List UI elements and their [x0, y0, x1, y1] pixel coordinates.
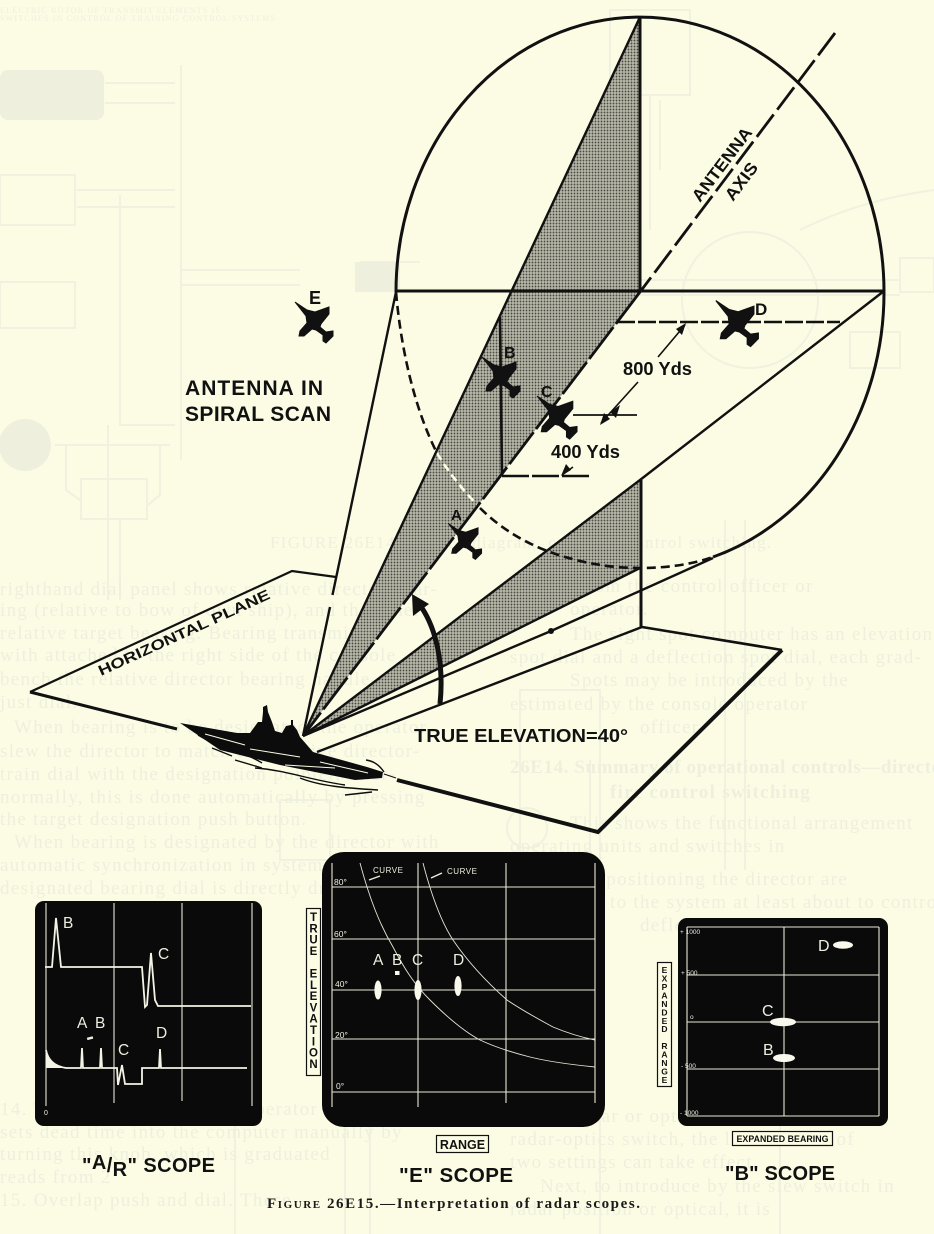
bleed-through ghost print from reverse page: two settings can take effect.: [510, 1152, 759, 1173]
B range scale: [680, 929, 700, 1117]
bleed-through ghost print from reverse page: radar-optics switch, the latter which of: [510, 1129, 855, 1150]
bleed-through ghost print from reverse page: righthand dial panel shows relative director bear-: [0, 579, 438, 600]
ship illustration: [180, 705, 396, 795]
bleed-through ghost print from reverse page: 15. Overlap push and dial. These: [0, 1190, 292, 1211]
bleed-through ghost print from reverse page: SWITCHES IN CONTROL OF TRAINING CONTROL SYSTEMS: [0, 14, 275, 23]
bleed-through ghost print from reverse page: normally, this is done automatically by pressing: [0, 787, 426, 808]
label: antenna axis: AXIS: [721, 159, 762, 204]
range marks at targets: [502, 322, 840, 476]
expanded range axis label: R: [661, 1041, 668, 1051]
E target labels: [373, 952, 464, 969]
B range scale: + 500: [681, 970, 698, 977]
bleed-through ghost print from reverse page: just dial.: [0, 692, 78, 713]
bleed-through ghost print from reverse page: radar position or optical, it is: [510, 1199, 771, 1220]
A/R labels: 0: [44, 1110, 48, 1117]
E curve callouts: CURVE: [373, 866, 403, 875]
B target labels: [762, 938, 830, 1059]
A/R scope title: A: [92, 1152, 106, 1174]
expanded range axis label: D: [661, 1024, 668, 1034]
target E aircraft: E: [309, 288, 321, 308]
bleed-through ghost print from reverse page: train dial with the designation pointer, inter-: [0, 764, 396, 785]
bleed-through ghost print from reverse page: relative target bearing. Bearing transmitter: [0, 623, 380, 644]
true elevation axis label: V: [310, 1002, 318, 1014]
bleed-through ghost print from reverse page: turning this knob, which is graduated: [0, 1144, 331, 1165]
B scope: [678, 918, 888, 1126]
A/R labels: B: [95, 1015, 105, 1032]
A/R labels: C: [158, 946, 169, 963]
expanded range axis label: X: [662, 974, 668, 984]
bleed-through ghost print from reverse page: switch radar or optical or: [510, 1106, 735, 1127]
expanded range axis label: D: [661, 1007, 668, 1017]
bleed-through ghost print from reverse page: the target designation push button.: [0, 809, 307, 830]
E degree scale: 80°: [334, 877, 347, 887]
A/R lower trace: [46, 1048, 247, 1085]
bleed-through ghost print from reverse page: This shows the functional arrangement: [570, 813, 914, 834]
expanded range axis label: A: [661, 990, 668, 1000]
bleed-through ghost print from reverse page: operator.: [570, 599, 649, 620]
bleed-through ghost print from reverse page: Next, to introduce by the slew switch in: [540, 1176, 895, 1197]
true elevation axis label: E: [310, 946, 318, 958]
target C aircraft: C: [541, 384, 553, 401]
vertical line through target B: [500, 317, 502, 476]
bleed-through ghost print from reverse page: spot dial and a deflection spot dial, each grad-: [510, 647, 922, 668]
shaded wedge: upper scan sector: [303, 17, 640, 736]
label: antenna axis: ANTENNA: [688, 124, 756, 205]
target D aircraft: D: [755, 300, 767, 319]
label: antenna in spiral scan: [185, 377, 331, 426]
bleed-through ghost print from reverse page: automatic synchronization in system, the inter-: [0, 855, 417, 876]
A/R scope title: ": [82, 1155, 91, 1177]
true elevation axis label: [306, 908, 320, 1076]
bleed-through ghost print from reverse page: reads from 2: [0, 1167, 112, 1188]
A/R scope: [35, 901, 262, 1126]
true elevation axis label: E: [310, 968, 318, 980]
expanded range axis label: [658, 962, 672, 1086]
dimension arrow heads: [548, 323, 686, 634]
A/R scope title: " SCOPE: [128, 1155, 215, 1177]
A/R labels: [44, 915, 169, 1117]
label: antenna in spiral scan: ANTENNA IN: [185, 377, 323, 400]
A/R labels: B: [63, 915, 73, 932]
E target labels: B: [392, 952, 402, 969]
expanded bearing axis label: EXPANDED BEARING: [736, 1134, 829, 1144]
bleed-through ghost print from reverse page: officer.: [640, 717, 704, 738]
true elevation axis label: T: [310, 1025, 317, 1037]
target E aircraft: [295, 288, 333, 343]
expanded range axis label: N: [661, 1058, 668, 1068]
bleed-through ghost print from reverse page: fire control switching: [610, 782, 811, 803]
target D aircraft: [716, 300, 767, 347]
B range scale: + 1000: [680, 929, 700, 936]
A/R screen: [35, 901, 262, 1126]
true elevation axis label: T: [310, 912, 317, 924]
bleed-through ghost print from reverse page: Spots may be introduced by the: [570, 670, 849, 691]
A/R scope title: R: [113, 1159, 128, 1181]
expanded bearing axis label: [732, 1132, 832, 1146]
E curve callouts: [369, 866, 477, 880]
A/R labels: C: [118, 1042, 129, 1059]
label: 800 yards: 800 Yds: [623, 359, 692, 379]
bleed-through ghost print from reverse page: ELECTRIC ROTOR OF TRANSMIT ELEMENTS IS: [0, 6, 220, 15]
E degree scale: 0°: [336, 1081, 344, 1091]
E scope: [322, 852, 605, 1127]
figure caption: Figure 26E15.—Interpretation of radar scopes.: [267, 1196, 640, 1212]
spiral scan circle, hidden dashed part: [396, 292, 713, 568]
A/R upper trace: [45, 918, 251, 1007]
bleed-through ghost print from reverse page: ing (relative to bow of own ship), and the other: [0, 600, 421, 621]
true elevation axis label: I: [312, 1036, 315, 1048]
A/R scope title: /: [107, 1155, 113, 1177]
expanded range axis label: N: [661, 999, 668, 1009]
true elevation axis label: O: [309, 1048, 318, 1060]
target A aircraft: A: [451, 507, 462, 524]
B range scale: - 1000: [680, 1110, 699, 1117]
B target blips: [770, 941, 853, 1062]
A/R labels: D: [156, 1025, 167, 1042]
bleed-through ghost print from reverse page: sets dead time into the computer manually by: [0, 1122, 403, 1143]
antenna axis dashed line: [303, 33, 835, 736]
bleed-through ghost print from reverse page: When bearing is to be designated, the operator: [14, 717, 427, 738]
target C aircraft: [537, 384, 577, 439]
bleed-through ghost print from reverse page: operating units and switches in: [510, 836, 786, 857]
bleed-through ghost print from reverse page: ranges, from the control officer or: [510, 576, 814, 597]
label: true elevation: TRUE ELEVATION=40°: [414, 725, 628, 746]
B scope title: "B" SCOPE: [725, 1163, 835, 1185]
target B aircraft: [482, 345, 520, 398]
bleed-through ghost print from reverse page: For positioning the director are: [570, 869, 848, 890]
horizontal and vertical frame lines: [396, 17, 884, 627]
B target labels: C: [762, 1003, 774, 1020]
spiral scan circle, solid part: [396, 17, 884, 557]
E target labels: D: [453, 952, 464, 969]
E grid lines: [332, 863, 595, 1107]
E degree scale: [334, 877, 348, 1091]
label: horizontal plane: HORIZONTAL PLANE: [96, 587, 273, 680]
expanded range axis label: E: [662, 965, 668, 975]
A/R decay fill: [46, 1050, 66, 1068]
bleed-through ghost print from reverse page: FIGURE 26E14.—Block diagram, complete control switching.: [270, 533, 772, 552]
target A aircraft: [448, 507, 482, 559]
label: antenna in spiral scan: SPIRAL SCAN: [185, 403, 331, 426]
E degree scale: 40°: [335, 979, 348, 989]
true elevation curved arrow: [412, 594, 441, 704]
E target labels: C: [412, 952, 423, 969]
true elevation axis label: N: [309, 1059, 318, 1071]
A/R labels: A: [77, 1015, 88, 1032]
A/R grid lines: [46, 903, 252, 1106]
B range scale: - 500: [681, 1063, 696, 1070]
E scope title: "E" SCOPE: [399, 1164, 513, 1187]
B screen: [678, 918, 888, 1126]
bleed-through ghost print from reverse page: designated bearing dial is directly driven.: [0, 878, 370, 899]
bleed-through ghost print from reverse page: with attached to the right side of the console: [0, 645, 396, 666]
bleed-through ghost print from reverse page: When bearing is designated by the director with: [14, 832, 440, 853]
dimension arrow lines: [562, 325, 685, 475]
B range scale: o: [690, 1014, 694, 1021]
B grid lines: [687, 927, 879, 1116]
expanded range axis label: P: [662, 982, 668, 992]
B target labels: B: [763, 1042, 774, 1059]
bleed-through ghost print from reverse page: The sight spot computer has an elevation: [570, 624, 933, 645]
horizontal plane outline: [30, 571, 782, 832]
target B aircraft: B: [504, 345, 516, 362]
E degree scale: 60°: [334, 929, 347, 939]
true elevation axis label: A: [309, 1014, 318, 1026]
range axis label: RANGE: [440, 1138, 485, 1152]
E target labels: A: [373, 952, 384, 969]
E degree scale: 20°: [335, 1030, 348, 1040]
expanded range axis label: E: [662, 1016, 668, 1026]
true elevation axis label: U: [309, 935, 318, 947]
true elevation axis label: L: [310, 980, 317, 992]
label: 400 yards: 400 Yds: [551, 442, 620, 462]
bleed-through ghost print from reverse page: 14. Time setting knob. The operator: [0, 1099, 318, 1120]
expanded range axis label: G: [661, 1066, 668, 1076]
true elevation axis label: R: [309, 923, 318, 935]
E screen: [322, 852, 605, 1127]
B target labels: D: [818, 938, 830, 955]
E range curves: [360, 863, 595, 1067]
main antenna scan diagram: [303, 17, 884, 752]
bleed-through ghost print from reverse page: bench the relative director bearing handle: [0, 669, 371, 690]
true elevation axis label: E: [310, 991, 318, 1003]
bleed-through ghost print from reverse page: estimated by the console operator: [510, 694, 808, 715]
E target blips: [374, 971, 462, 1000]
cone edge lines: [303, 17, 884, 752]
shaded wedge: lower scan sector: [303, 480, 640, 736]
bleed-through ghost print from reverse page: slew the director to match the relative director-: [0, 741, 420, 762]
E curve callouts: CURVE: [447, 867, 477, 876]
expanded range axis label: A: [661, 1050, 668, 1060]
bleed-through ghost print from reverse page: deflection automatic, semi: [640, 915, 875, 936]
expanded range axis label: E: [662, 1075, 668, 1085]
